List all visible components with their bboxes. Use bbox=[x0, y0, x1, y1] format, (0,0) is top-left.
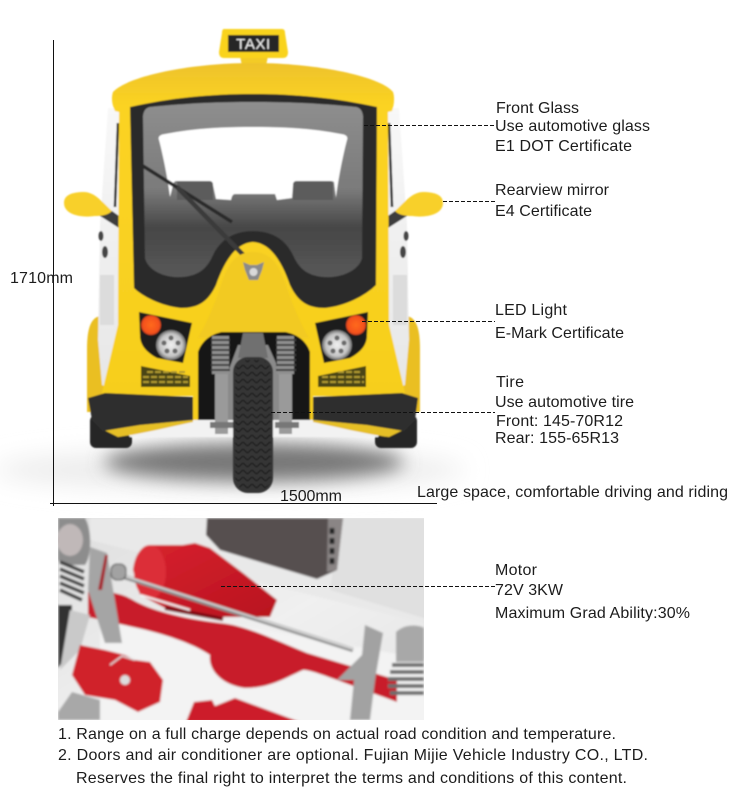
callout: motor: Maximum Grad Ability:30% bbox=[495, 605, 690, 622]
emblem bbox=[243, 262, 264, 280]
callout: rearview mirror: E4 Certificate bbox=[495, 203, 592, 220]
left lamp housing bbox=[139, 312, 192, 363]
axle housing bbox=[88, 592, 397, 702]
underbody bbox=[118, 420, 388, 437]
label: width: 1500mm bbox=[280, 488, 342, 505]
yellow body bbox=[102, 63, 405, 420]
motor photo bbox=[58, 518, 424, 720]
vehicle front view bbox=[64, 29, 443, 493]
taxi sign: TAXI bbox=[236, 36, 271, 53]
windshield reflection bbox=[159, 127, 347, 200]
callout: LED light bbox=[362, 302, 624, 342]
right upright bbox=[337, 625, 383, 720]
rear fenders bbox=[87, 316, 420, 412]
fork panels bbox=[228, 345, 280, 420]
left spring and upright bbox=[57, 518, 122, 670]
center mudguard bbox=[198, 252, 309, 338]
suspension opening bbox=[198, 332, 310, 420]
caption: large space: Large space, comfortable driving and riding bbox=[417, 484, 728, 501]
white side panels bbox=[98, 108, 409, 395]
callout: tire: Rear: 155-65R13 bbox=[495, 430, 619, 447]
callout: rearview mirror bbox=[443, 182, 610, 220]
gearbox bbox=[72, 645, 163, 712]
mirrors bbox=[64, 192, 443, 228]
callout: tire: Front: 145-70R12 bbox=[496, 413, 623, 430]
footnotes: 1. Range on a full charge depends on actual road condition and temperature. bbox=[58, 726, 616, 743]
bumpers bbox=[88, 393, 418, 437]
wiper bbox=[143, 166, 255, 267]
callout: motor: 72V 3KW bbox=[495, 582, 564, 599]
radiator bbox=[206, 518, 343, 579]
label: height: 1710mm bbox=[10, 270, 73, 287]
glass bbox=[143, 102, 363, 277]
footnotes: 2. Doors and air conditioner are optional. Fujian Mijie Vehicle Industry CO., LTD. bbox=[58, 747, 648, 764]
windshield frame bbox=[130, 94, 377, 308]
callout: tire: Use automotive tire bbox=[495, 394, 634, 411]
shock absorbers bbox=[210, 333, 299, 434]
callout: front glass: Front Glass bbox=[496, 100, 579, 117]
rear wheels bbox=[90, 415, 417, 448]
lower red part bbox=[186, 698, 300, 722]
dimension lines bbox=[50, 40, 437, 506]
right spring bbox=[388, 625, 424, 693]
callout: LED light: E-Mark Certificate bbox=[495, 325, 624, 342]
right lamp housing bbox=[315, 312, 368, 363]
callout: tire bbox=[271, 374, 634, 447]
callout: tire: Tire bbox=[496, 374, 524, 391]
front tire bbox=[233, 357, 273, 493]
ground shadow bbox=[0, 443, 465, 490]
callout: motor: Motor bbox=[495, 562, 538, 579]
floor bracket bbox=[58, 692, 100, 720]
callout: motor bbox=[221, 562, 690, 622]
callout: front glass: E1 DOT Certificate bbox=[495, 138, 632, 155]
callout: front glass bbox=[364, 100, 650, 155]
motor body bbox=[133, 543, 277, 619]
callout: LED light: LED Light bbox=[495, 302, 568, 319]
callout: front glass: Use automotive glass bbox=[495, 118, 650, 135]
tie rod bbox=[111, 564, 353, 650]
taxi sign bbox=[219, 29, 288, 82]
light floor panel bbox=[91, 518, 132, 540]
footnotes: Reserves the final right to interpret the terms and conditions of this content. bbox=[76, 770, 627, 787]
footnotes bbox=[58, 726, 648, 787]
grilles bbox=[141, 366, 366, 387]
seats bbox=[177, 181, 333, 200]
callout: rearview mirror: Rearview mirror bbox=[495, 182, 610, 199]
